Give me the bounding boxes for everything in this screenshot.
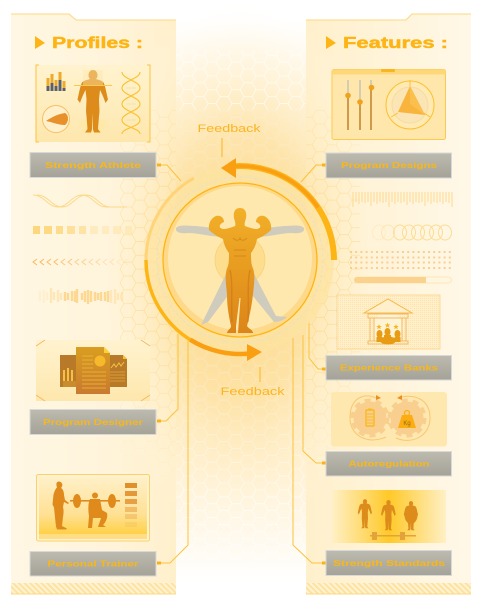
decoration: waves xyxy=(33,195,127,207)
icon: left document xyxy=(60,355,77,387)
chart: level bars xyxy=(125,483,137,527)
label: Autoregulation: Autoregulation xyxy=(348,458,430,468)
decoration: progress bar xyxy=(354,277,452,283)
image: autoregulation gears xyxy=(331,392,447,446)
heading: Features xyxy=(326,35,448,52)
label: Program Designs xyxy=(326,153,452,178)
heading: Profiles xyxy=(35,35,143,52)
heading: Profiles: Profiles : xyxy=(52,35,143,52)
icon: kg weight gear: Kg xyxy=(403,421,411,427)
heading: Features: Features : xyxy=(343,35,448,52)
icon: bar chart xyxy=(46,72,66,91)
arrows: cycle xyxy=(376,395,402,400)
decoration: fading squares xyxy=(33,226,132,234)
figure: muscular body xyxy=(381,500,396,530)
connector lines xyxy=(157,165,326,563)
label: Experience Banks: Experience Banks xyxy=(340,362,438,372)
label: Program Designer: Program Designer xyxy=(43,417,144,427)
image: strength standards xyxy=(332,490,446,543)
decoration: overlapping circles xyxy=(372,225,452,240)
label: Personal Trainer: Personal Trainer xyxy=(48,558,139,568)
image: program documents xyxy=(36,340,150,401)
panel: features background xyxy=(306,14,471,594)
label: Autoregulation xyxy=(326,452,452,476)
arrow: bottom sweep xyxy=(190,340,262,361)
label: Personal Trainer xyxy=(30,552,156,576)
label: Strength Athlete xyxy=(30,152,156,178)
label: Strength Standards xyxy=(326,550,452,576)
figure: lean body xyxy=(358,499,372,528)
tick: Feedback top xyxy=(221,138,223,157)
panel: profiles background xyxy=(11,14,176,594)
decoration: chevrons xyxy=(33,259,128,265)
image: personal trainer squat xyxy=(36,474,150,541)
text: Feedback bottom: Feedback xyxy=(220,386,285,398)
figure: central bodybuilder xyxy=(209,208,271,333)
central glow with hexagon pattern xyxy=(120,28,360,560)
icon: centre document xyxy=(76,347,110,394)
icon: DNA helix xyxy=(122,72,140,134)
radar dial xyxy=(386,80,434,129)
figure: heavy body xyxy=(404,501,418,530)
text: Feedback top: Feedback xyxy=(198,123,261,135)
label: Experience Banks xyxy=(326,356,452,380)
sliders xyxy=(345,80,374,130)
image: strength athlete body analysis xyxy=(36,65,150,142)
decoration: dot matrix xyxy=(350,252,452,268)
central emblem xyxy=(146,158,334,361)
label: Program Designer xyxy=(30,410,156,434)
tick: Feedback bottom xyxy=(259,367,261,382)
decoration: tick ruler xyxy=(353,192,452,207)
label: Program Designs: Program Designs xyxy=(341,160,437,170)
disc and rings xyxy=(146,166,334,354)
label: Strength Athlete: Strength Athlete xyxy=(45,160,141,170)
icon: right document xyxy=(110,355,127,387)
icon: muscle fibre xyxy=(42,106,70,132)
icon: barbell xyxy=(370,532,416,540)
figure: grey vitruvian limbs xyxy=(176,226,304,325)
figure: squatter with barbell xyxy=(70,492,120,528)
label: Strength Standards: Strength Standards xyxy=(333,558,445,568)
image: experience banks xyxy=(337,295,440,349)
arrow: top clockwise sweep xyxy=(221,158,334,260)
icon: bank building with people xyxy=(364,299,412,344)
figure: human body xyxy=(74,70,112,135)
decoration: audio bars xyxy=(40,288,122,304)
figure: trainer xyxy=(52,482,69,530)
image: program designs UI xyxy=(332,69,446,140)
icon: battery gear xyxy=(352,400,388,436)
